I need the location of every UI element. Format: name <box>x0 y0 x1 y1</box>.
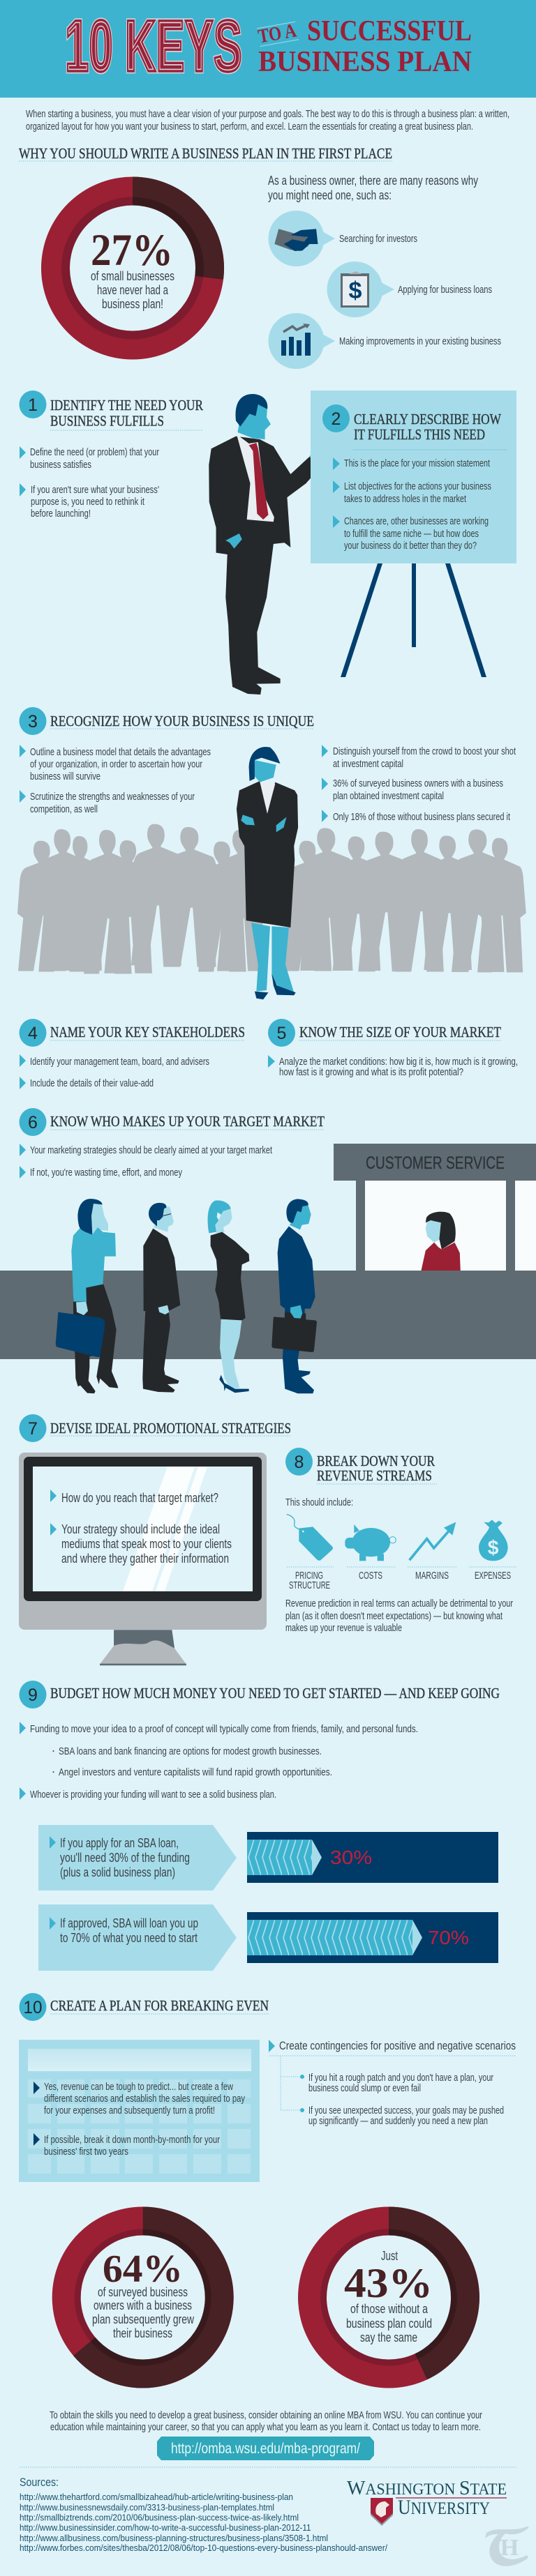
number badge 4 <box>20 1019 46 1047</box>
section 1: identify the need <box>20 391 203 520</box>
bullet: reach market <box>50 1490 218 1505</box>
reason: applying for business loans: Applying for business loans <box>398 285 492 296</box>
number badge 10: 10 <box>24 1998 42 2017</box>
bullet: define the need: business satisfies <box>30 460 91 471</box>
donut chart: 64%: 64% <box>103 2248 183 2291</box>
title: 10 keys: 10 KEYS <box>65 6 242 87</box>
panel: section 2 easel board <box>311 391 516 677</box>
heading 6: KNOW WHO MAKES UP YOUR TARGET MARKET <box>50 1113 325 1130</box>
number badge 9: 9 <box>28 1685 38 1705</box>
bullet: marketing strategies: Your marketing strategies should be clearly aimed at your target market <box>30 1145 272 1156</box>
text: should include: This should include: <box>285 1497 353 1508</box>
title: 10 keys <box>65 6 242 87</box>
heading 1: BUSINESS FULFILLS <box>50 413 164 430</box>
number badge 10 <box>20 1993 46 2021</box>
heading 7: DEVISE IDEAL PROMOTIONAL STRATEGIES <box>50 1420 291 1437</box>
connector tree <box>281 2056 304 2112</box>
bullet: month by month: If possible, break it down month-by-month for your <box>44 2135 220 2146</box>
bullet: mission statement: This is the place for your mission statement <box>344 458 490 469</box>
donut chart: 27%: business plan! <box>102 297 163 311</box>
man with glasses <box>142 1203 180 1393</box>
text: rough patch <box>308 2073 493 2094</box>
illustration: computer monitor <box>19 1453 267 1665</box>
section 9: budget <box>20 1681 500 1971</box>
man with briefcase <box>271 1199 317 1393</box>
number badge 8: 8 <box>295 1453 304 1472</box>
donut chart: 43%: Just <box>381 2249 398 2263</box>
bullet: competition: competition, as well <box>30 804 98 815</box>
donut chart: 43%: of those without a <box>350 2302 429 2316</box>
icons row <box>287 1515 508 1561</box>
bullet: scenarios: for your expenses and subsequently turn a profit! <box>44 2105 215 2116</box>
reason: searching for investors: Searching for investors <box>339 234 417 245</box>
bullet: funding: Funding to move your idea to a proof of concept will typically come from friends, family, and personal funds. <box>30 1724 418 1735</box>
icon labels <box>287 1567 517 1591</box>
sources list: http://smallbiztrends.com/2010/06/business-plan-success-twice-as-likely.html <box>20 2513 299 2523</box>
bullet: ideal mediums: mediums that speak most to your clients <box>61 1537 232 1551</box>
bullet: business model: of your organization, in order to ascertain how your <box>30 759 202 770</box>
donut chart: 43%: 43% <box>344 2260 433 2306</box>
donut chart: 43%: say the same <box>360 2331 417 2344</box>
heading 2 <box>353 411 507 450</box>
section 10: breaking even <box>19 1993 516 2182</box>
bullet: rethink: purpose is, you need to rethink it <box>31 497 144 508</box>
logo: washington state university: WASHINGTON STATE <box>347 2477 507 2499</box>
donut chart: 27%: of small businesses <box>91 269 174 283</box>
bullet: 36%: plan obtained investment capital <box>333 791 444 802</box>
bullet: management team: Identify your management team, board, and advisers <box>30 1056 209 1068</box>
bullet: niche: Chances are, other businesses are working <box>344 516 489 527</box>
text: revenue prediction <box>285 1598 513 1634</box>
bullet: value-add <box>20 1077 154 1089</box>
callout: 70% <box>38 1904 237 1971</box>
bullet: rethink: If you aren't sure what your business' <box>31 485 159 496</box>
heading 1 <box>50 397 203 430</box>
bullet: define the need <box>20 446 159 471</box>
number badge 5 <box>268 1019 295 1047</box>
title: to a: TO A <box>256 20 299 47</box>
number badge 2 <box>322 404 350 432</box>
reasons intro text <box>268 174 478 202</box>
text: unexpected success <box>308 2105 504 2127</box>
heading 8: REVENUE STREAMS <box>317 1467 432 1484</box>
bullet: scenarios <box>34 2082 246 2116</box>
callout: 70%: If approved, SBA will loan you up <box>60 1916 198 1930</box>
bullet: niche: to fulfill the same niche — but how does <box>344 529 479 540</box>
bullet: niche: your business do it better than they do? <box>344 540 477 552</box>
intro text <box>26 109 509 132</box>
woman in dress <box>208 1200 249 1393</box>
bullet: business model: business will survive <box>30 771 100 782</box>
progress bar: 70%: 70% <box>428 1927 469 1948</box>
illustration: crowd silhouettes <box>17 824 526 973</box>
reason: making improvements <box>268 313 501 369</box>
number badge 7: 7 <box>28 1419 38 1439</box>
bullet: distinguish <box>322 745 516 770</box>
heading 8: BREAK DOWN YOUR <box>317 1453 435 1469</box>
heading 2: CLEARLY DESCRIBE HOW <box>354 411 501 427</box>
bullet: ideal mediums: and where they gather their information <box>61 1552 229 1566</box>
reason: searching for investors <box>268 211 417 266</box>
donut chart: 64%: of surveyed business <box>98 2285 188 2299</box>
reason: applying for business loans <box>327 262 492 317</box>
callout: 30%: you'll need 30% of the funding <box>60 1851 190 1865</box>
logo: washington state university: UNIVERSITY <box>398 2496 490 2519</box>
bullet: distinguish: at investment capital <box>333 759 403 770</box>
number badge 1: 1 <box>28 395 38 415</box>
heading 3: RECOGNIZE HOW YOUR BUSINESS IS UNIQUE <box>50 713 314 729</box>
clerk figure <box>421 1212 461 1271</box>
number badge 3 <box>20 707 46 735</box>
donut chart: 43% <box>298 2206 479 2388</box>
callout: 30%: (plus a solid business plan) <box>60 1865 175 1879</box>
bullet: business model: Outline a business model that details the advantages <box>30 747 211 758</box>
sources list: http://www.thehartford.com/smallbizahead/hub-article/writing-business-plan <box>20 2492 293 2502</box>
number badge 3: 3 <box>28 712 38 732</box>
section 7: promotional strategies <box>19 1414 291 1665</box>
sources list: http://www.forbes.com/sites/thesba/2012/08/06/top-10-questions-every-business-planshould-answer/ <box>20 2543 387 2553</box>
watermark logo <box>485 2526 529 2566</box>
icon labels: STRUCTURE <box>289 1580 330 1591</box>
number badge 8 <box>285 1448 313 1476</box>
closing text <box>50 2410 482 2433</box>
icon labels: PRICING <box>295 1570 323 1582</box>
number badge 1 <box>20 391 46 418</box>
donut chart: 27% <box>41 177 224 360</box>
heading: why write a plan: WHY YOU SHOULD WRITE A BUSINESS PLAN IN THE FIRST PLACE <box>19 145 392 162</box>
button: program url: http://omba.wsu.edu/mba-program/ <box>171 2441 360 2457</box>
logo: washington state university <box>347 2477 507 2526</box>
bullet: funding <box>20 1722 418 1735</box>
monitor stand <box>100 1630 186 1665</box>
number badge 6 <box>20 1108 46 1136</box>
callout: 30%: If you apply for an SBA loan, <box>60 1836 179 1850</box>
heading 1: IDENTIFY THE NEED YOUR <box>50 397 203 414</box>
section 4: stakeholders <box>20 1019 245 1089</box>
bullet: solid plan: Whoever is providing your funding will want to see a solid business plan. <box>30 1789 276 1801</box>
text: revenue prediction: makes up your revenue is valuable <box>285 1623 402 1634</box>
donut chart: 64%: owners with a business <box>94 2298 192 2312</box>
easel legs <box>341 563 486 677</box>
donut chart: 43%: business plan could <box>346 2317 432 2331</box>
sources list: http://www.businessinsider.com/how-to-write-a-successful-business-plan-2012-11 <box>20 2523 311 2533</box>
number badge 9 <box>20 1681 46 1709</box>
icon: money bag <box>479 1520 508 1561</box>
heading 8 <box>317 1453 437 1484</box>
text: rough patch: business could slump or even fail <box>308 2083 421 2094</box>
number badge 2: 2 <box>332 409 341 429</box>
bullet: objectives <box>333 480 491 505</box>
icon labels: EXPENSES <box>475 1570 511 1582</box>
sub-bullet: angel investors: Angel investors and venture capitalists will fund rapid growth opportunities. <box>59 1767 332 1778</box>
progress bar: 30%: 30% <box>330 1847 372 1868</box>
bullet: rethink: before launching! <box>31 508 91 520</box>
bullet: month by month <box>34 2133 220 2158</box>
icon: clipboard with dollar <box>341 271 369 308</box>
number badge 7 <box>20 1414 46 1442</box>
illustration: customer service counter <box>0 1144 536 1359</box>
donut chart: 27%: 27% <box>91 225 173 275</box>
panel: calendar <box>19 2040 260 2182</box>
sub-bullet: sba loans: SBA loans and bank financing are options for modest growth businesses. <box>59 1746 322 1757</box>
icon labels: COSTS <box>359 1570 382 1582</box>
bullet: 36% <box>322 778 503 802</box>
bullet: solid plan <box>20 1787 276 1801</box>
bullet: ideal mediums <box>50 1522 232 1566</box>
number badge 4: 4 <box>28 1024 38 1043</box>
bullet: management team <box>20 1054 209 1068</box>
icon: shield <box>371 2498 393 2526</box>
illustration: people in queue <box>56 1199 317 1393</box>
bullet: wasting time: If not, you're wasting time, effort, and money <box>30 1167 183 1179</box>
woman with bag <box>56 1199 118 1393</box>
watermark logo: H <box>500 2535 519 2561</box>
sources list: http://www.businessnewsdaily.com/3313-business-plan-templates.html <box>20 2503 274 2513</box>
heading 10: CREATE A PLAN FOR BREAKING EVEN <box>50 1997 269 2014</box>
section 3: recognize uniqueness <box>17 707 526 999</box>
illustration: businesswoman <box>237 747 298 999</box>
icon: price tag <box>287 1515 333 1561</box>
reasons intro text: you might need one, such as: <box>268 188 392 202</box>
bullet: scenarios: different scenarios and establish the sales required to pay <box>44 2093 246 2105</box>
bullet: value-add: Include the details of their value-add <box>30 1078 154 1089</box>
icon: growth arrow <box>410 1522 456 1560</box>
bullet: ideal mediums: Your strategy should include the ideal <box>61 1522 220 1536</box>
callout: 30% <box>38 1825 237 1891</box>
bullet: rethink <box>20 483 159 520</box>
section 8: revenue streams <box>285 1448 517 1634</box>
bullet: scenarios: Yes, revenue can be tough to predict... but create a few <box>44 2082 233 2093</box>
header banner <box>0 0 536 98</box>
bullet: market conditions <box>268 1055 518 1078</box>
bullet: business model <box>20 745 211 782</box>
title: successful business plan: SUCCESSFUL <box>307 15 472 47</box>
progress bar: 30% <box>247 1832 498 1883</box>
heading 4: NAME YOUR KEY STAKEHOLDERS <box>50 1024 245 1040</box>
title: successful business plan: BUSINESS PLAN <box>258 46 472 78</box>
sources list: http://www.allbusiness.com/business-planning-structures/business-plans/3508-1.html <box>20 2533 328 2543</box>
bullet: objectives: List objectives for the actions your business <box>344 481 491 492</box>
number badge 6: 6 <box>28 1113 38 1132</box>
donut chart: 64%: plan subsequently grew <box>92 2312 195 2326</box>
bullet: competition: Scrutinize the strengths and weaknesses of your <box>30 791 195 803</box>
section 6: target market <box>20 1108 325 1179</box>
title: 10 keys: 10 KEYS <box>65 6 242 87</box>
illustration: businessman presenting <box>209 394 335 695</box>
icon labels: MARGINS <box>415 1570 449 1582</box>
number badge 5: 5 <box>277 1024 286 1043</box>
donut chart: 27%: have never had a <box>97 283 169 297</box>
icon: piggy bank <box>345 1524 396 1561</box>
icon: clipboard with dollar: $ <box>349 278 362 304</box>
bullet: wasting time <box>20 1166 183 1179</box>
icon: handshake <box>274 229 318 251</box>
icon: money bag: $ <box>488 1537 499 1559</box>
donut chart: 64% <box>52 2206 234 2388</box>
bullet: competition <box>20 790 195 815</box>
callout: 70%: to 70% of what you need to start <box>60 1931 198 1945</box>
title: successful business plan <box>258 15 472 78</box>
sources list: Sources: <box>20 2476 59 2489</box>
title: 10 keys: 10 KEYS <box>65 6 242 87</box>
bullet: reach market: How do you reach that target market? <box>61 1491 218 1505</box>
donut chart: 64%: their business <box>113 2326 172 2340</box>
heading 2: IT FULFILLS THIS NEED <box>354 426 485 443</box>
bullet: niche <box>333 515 489 552</box>
bullet: objectives: takes to address holes in the market <box>344 494 466 505</box>
bullet: market conditions: how fast is it growing and what is its profit potential? <box>279 1067 463 1078</box>
button: program url <box>157 2437 374 2460</box>
progress bar: 70% <box>247 1912 498 1963</box>
bullet: mission statement <box>333 457 490 470</box>
bullet: define the need: Define the need (or problem) that your <box>30 447 159 458</box>
section 5: market size <box>268 1019 518 1078</box>
bullet: marketing strategies <box>20 1144 272 1156</box>
bullet: month by month: business' first two years <box>44 2146 128 2158</box>
sources list <box>20 2476 387 2553</box>
icon: bar chart with arrow <box>281 324 311 356</box>
